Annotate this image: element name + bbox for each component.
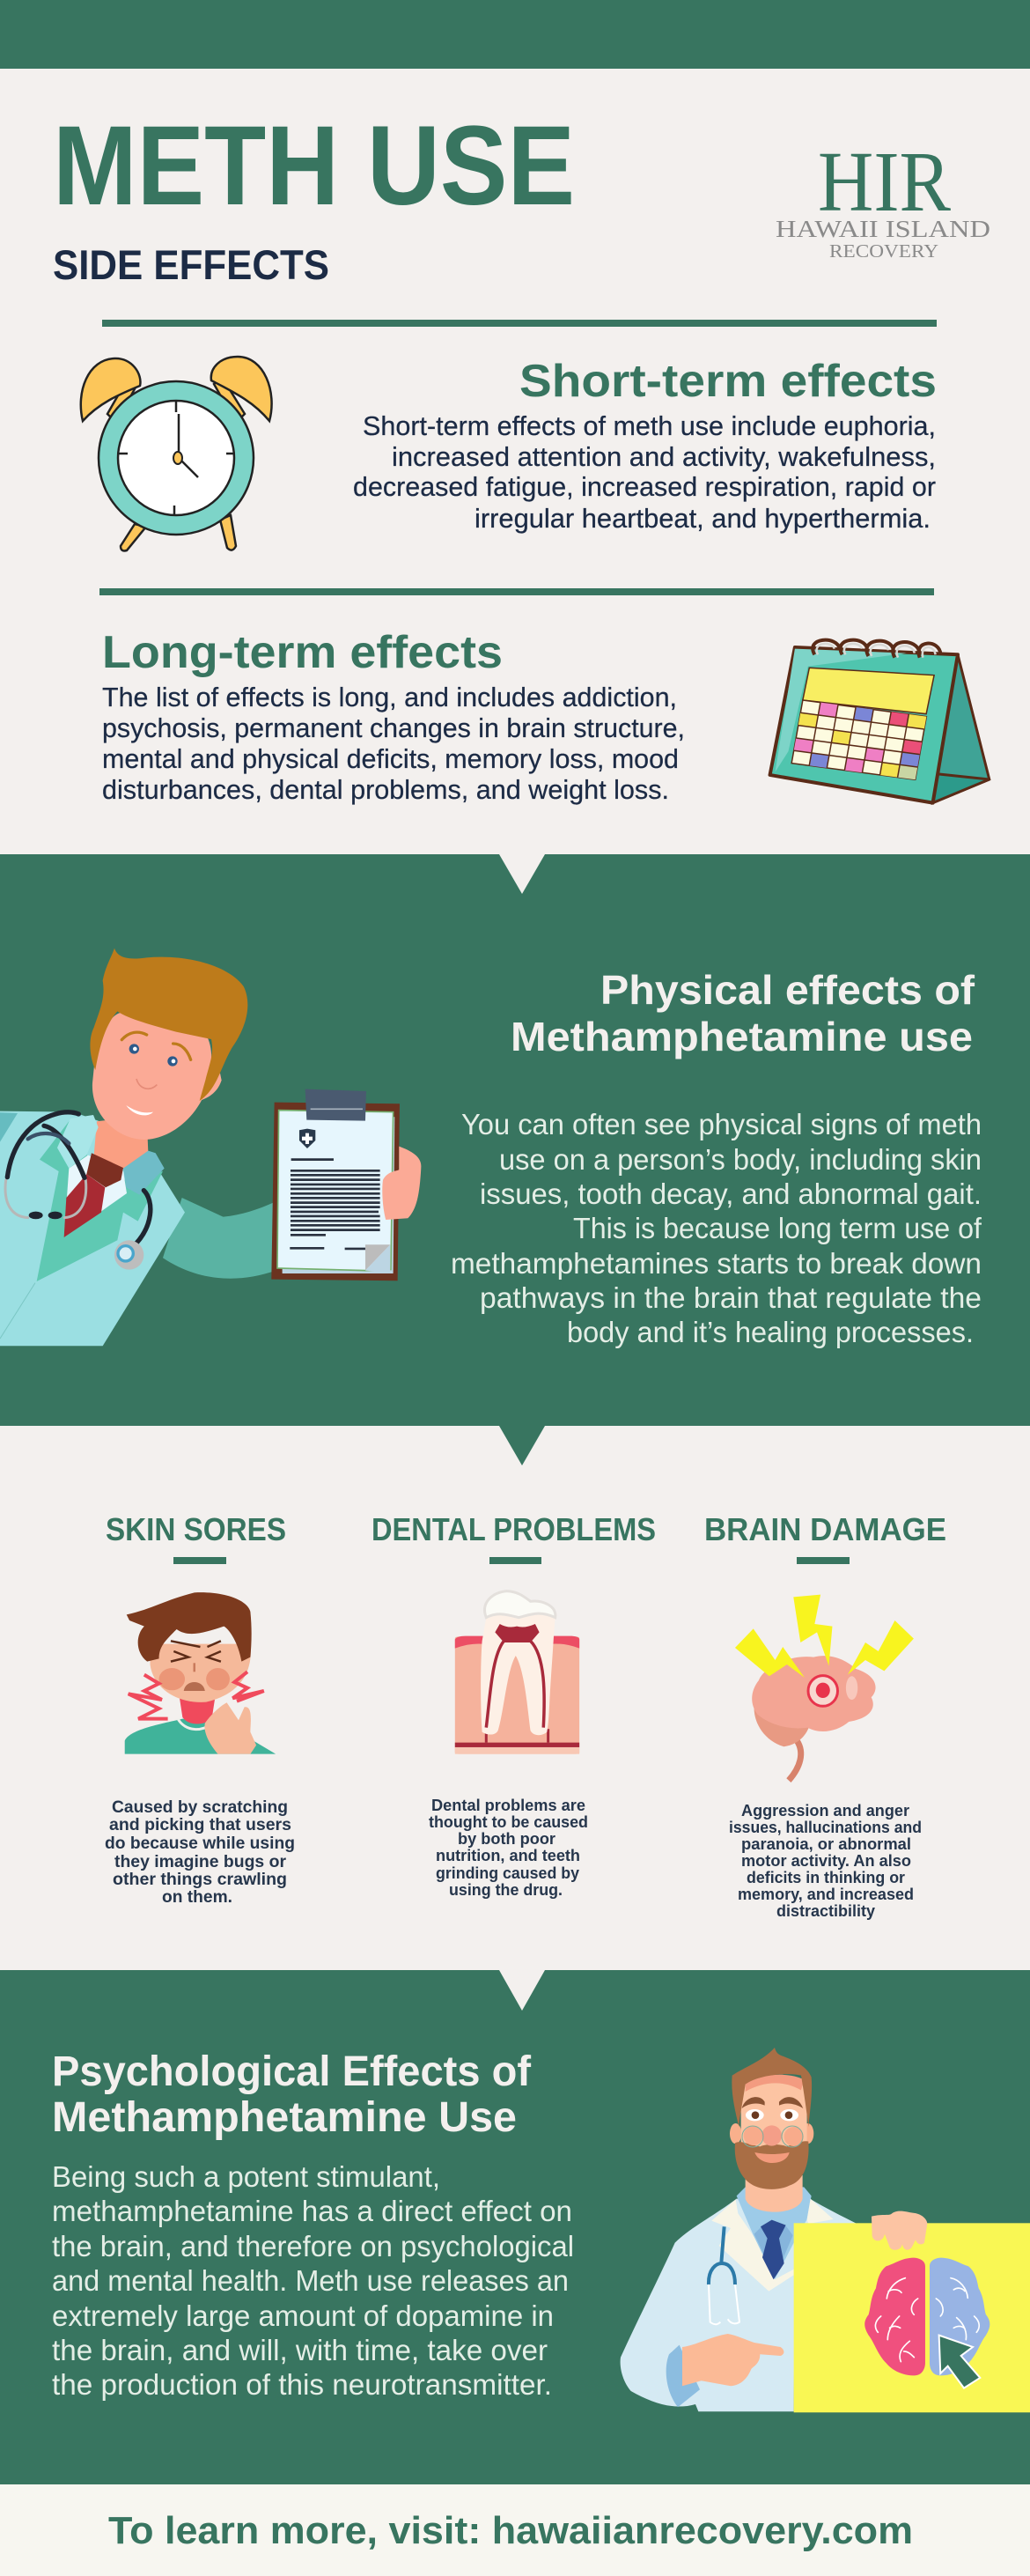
heading: BRAIN DAMAGE bbox=[704, 1511, 946, 1547]
text block: they imagine bugs or bbox=[114, 1853, 287, 1871]
footer text: To learn more, visit: hawaiianrecovery.com bbox=[108, 2509, 913, 2552]
text block: grinding caused by bbox=[436, 1864, 579, 1882]
heading: SKIN SORES bbox=[106, 1511, 286, 1547]
shirt bbox=[66, 1155, 127, 1213]
text block: thought to be caused bbox=[429, 1813, 588, 1831]
title: METH USE bbox=[53, 103, 575, 229]
footer band bbox=[0, 2484, 1030, 2576]
icon: tooth cross-section bbox=[455, 1591, 579, 1754]
text block: methamphetamine has a direct effect on bbox=[52, 2195, 572, 2227]
lab coat bbox=[621, 2199, 857, 2411]
clipboard bbox=[271, 1089, 421, 1281]
icon: person with sores bbox=[125, 1592, 276, 1754]
text block: Being such a potent stimulant, bbox=[52, 2160, 440, 2193]
text block bbox=[102, 682, 685, 805]
text block: Caused by scratching bbox=[112, 1798, 288, 1817]
fingers bbox=[872, 2211, 927, 2250]
text block: irregular heartbeat, and hyperthermia. bbox=[475, 503, 931, 534]
text block: pathways in the brain that regulate the bbox=[480, 1281, 982, 1314]
text block: by both poor bbox=[458, 1830, 555, 1848]
arrow: down to symptoms bbox=[499, 1426, 545, 1465]
panel: psychological effects bbox=[0, 1970, 1030, 2484]
text block: nutrition, and teeth bbox=[436, 1847, 580, 1864]
logo: Hawaii Island Recovery: HAWAII ISLAND bbox=[776, 216, 990, 242]
subtitle: SIDE EFFECTS bbox=[53, 241, 329, 288]
shirt bbox=[737, 2187, 812, 2279]
top band bbox=[0, 0, 1030, 69]
heading: Physical effects of bbox=[600, 967, 975, 1013]
heading: Methamphetamine Use bbox=[52, 2094, 517, 2141]
collars bbox=[123, 1151, 165, 1195]
text block bbox=[353, 410, 936, 534]
neck bbox=[746, 2175, 803, 2212]
text block bbox=[729, 1802, 922, 1920]
text block: paranoia, or abnormal bbox=[741, 1835, 911, 1853]
text block: decreased fatigue, increased respiration, rapid or bbox=[353, 471, 936, 502]
text block: The list of effects is long, and includes addiction, bbox=[102, 682, 677, 712]
text block bbox=[105, 1798, 295, 1907]
text block: issues, hallucinations and bbox=[729, 1819, 922, 1836]
text block: do because while using bbox=[105, 1834, 295, 1853]
stethoscope bbox=[5, 1112, 151, 1270]
face bbox=[741, 2078, 807, 2166]
text block: other things crawling bbox=[113, 1871, 287, 1889]
lapels bbox=[711, 2199, 834, 2292]
hair bbox=[732, 2048, 812, 2127]
text block: increased attention and activity, wakefulness, bbox=[392, 441, 936, 472]
panel: dental problems bbox=[372, 1511, 656, 1899]
text block: on them. bbox=[162, 1888, 232, 1907]
icon: alarm clock bbox=[81, 357, 272, 550]
facial features bbox=[121, 1032, 191, 1115]
icon: cursor arrow bbox=[939, 2336, 980, 2388]
heading: DENTAL PROBLEMS bbox=[372, 1511, 656, 1547]
text block: Dental problems are bbox=[431, 1797, 585, 1814]
neck bbox=[94, 1116, 148, 1170]
text block: psychosis, permanent changes in brain structure, bbox=[102, 712, 685, 743]
text block: distractibility bbox=[776, 1902, 875, 1920]
heading: Long-term effects bbox=[102, 627, 503, 678]
illustration: doctor holding a clipboard bbox=[0, 948, 421, 1346]
sleeve bbox=[163, 1198, 275, 1279]
text block bbox=[429, 1797, 588, 1899]
panel: short-term effects bbox=[81, 356, 937, 550]
panel: skin sores bbox=[105, 1511, 295, 1907]
face bbox=[92, 1013, 211, 1140]
icon: brain bbox=[864, 2258, 990, 2375]
text block: memory, and increased bbox=[738, 1886, 914, 1903]
text block bbox=[451, 1108, 982, 1348]
illustration: doctor with brain sign bbox=[621, 2048, 1030, 2412]
sign bbox=[794, 2223, 1030, 2412]
text block: and mental health. Meth use releases an bbox=[52, 2264, 569, 2297]
text block: Short-term effects of meth use include euphoria, bbox=[363, 410, 936, 441]
logo: Hawaii Island Recovery: HIR bbox=[818, 135, 951, 229]
text block: the brain, and will, with time, take over bbox=[52, 2334, 548, 2366]
stethoscope bbox=[709, 2226, 739, 2324]
icon: desk calendar bbox=[770, 640, 990, 803]
icon: brain with lightning bbox=[735, 1595, 914, 1781]
text block: body and it’s healing processes. bbox=[567, 1316, 974, 1348]
text block: deficits in thinking or bbox=[747, 1869, 905, 1886]
facial features bbox=[742, 2097, 804, 2147]
sleeve cuff bbox=[666, 2345, 700, 2407]
text block: motor activity. An also bbox=[741, 1852, 911, 1870]
text block: the production of this neurotransmitter. bbox=[52, 2368, 552, 2401]
heading: Short-term effects bbox=[519, 356, 937, 407]
text block: using the drug. bbox=[449, 1881, 563, 1899]
heading bbox=[52, 2048, 532, 2141]
ear bbox=[200, 1073, 222, 1101]
pointing hand bbox=[682, 2334, 784, 2386]
panel: physical effects bbox=[0, 854, 1030, 1426]
heading: Methamphetamine use bbox=[511, 1014, 973, 1059]
text block: Aggression and anger bbox=[741, 1802, 909, 1819]
text block: This is because long term use of bbox=[573, 1212, 982, 1244]
panel: brain damage bbox=[704, 1511, 946, 1920]
heading bbox=[511, 967, 975, 1059]
hair bbox=[90, 948, 247, 1101]
lab coat bbox=[0, 1111, 185, 1346]
heading: Psychological Effects of bbox=[52, 2048, 532, 2095]
necktie bbox=[761, 2220, 786, 2279]
text block: use on a person’s body, including skin bbox=[499, 1143, 982, 1176]
text block bbox=[52, 2160, 574, 2401]
beard bbox=[735, 2141, 809, 2189]
text block: methamphetamines starts to break down bbox=[451, 1247, 982, 1280]
text block: extremely large amount of dopamine in bbox=[52, 2299, 554, 2332]
text block: disturbances, dental problems, and weight loss. bbox=[102, 774, 669, 805]
text block: mental and physical deficits, memory loss, mood bbox=[102, 743, 679, 774]
text block: and picking that users bbox=[109, 1816, 291, 1834]
logo: Hawaii Island Recovery: RECOVERY bbox=[829, 240, 938, 262]
text block: You can often see physical signs of meth bbox=[461, 1108, 982, 1140]
text block: issues, tooth decay, and abnormal gait. bbox=[480, 1177, 982, 1210]
text block: the brain, and therefore on psychological bbox=[52, 2230, 574, 2262]
panel: long-term effects bbox=[102, 627, 990, 805]
necktie bbox=[64, 1153, 123, 1237]
ears bbox=[730, 2123, 813, 2144]
logo: Hawaii Island Recovery bbox=[776, 135, 990, 262]
